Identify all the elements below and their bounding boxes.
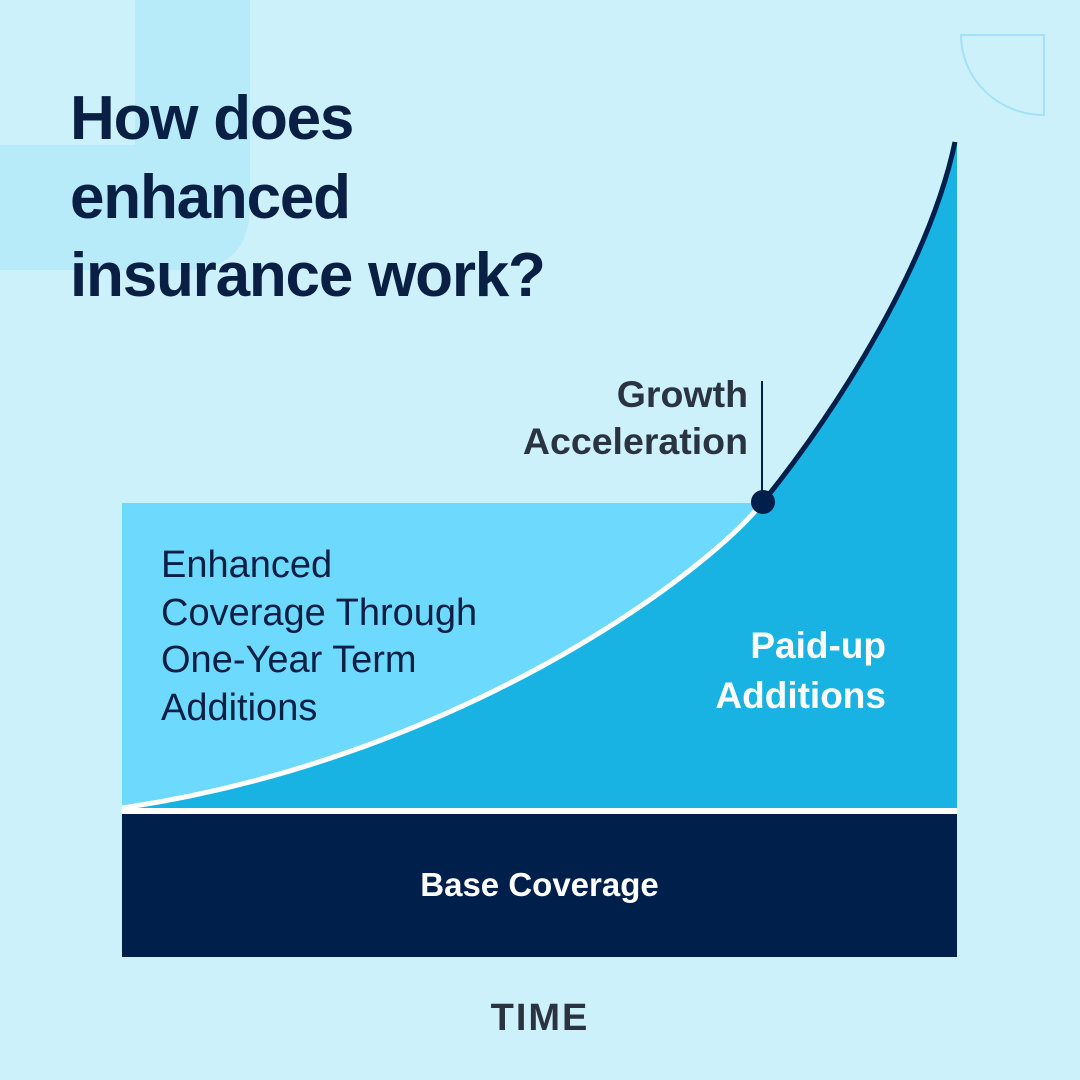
label: growth acceleration (523, 373, 748, 462)
label: term additions: Enhanced (161, 544, 332, 586)
title: insurance work? (70, 241, 545, 310)
label: paid-up additions: Additions (715, 675, 886, 716)
label: term additions: Additions (161, 686, 317, 728)
label: paid-up additions: Paid-up (750, 625, 886, 666)
label: base coverage: Base Coverage (420, 866, 659, 903)
title: How does (70, 84, 353, 153)
title: enhanced (70, 162, 350, 232)
label: growth acceleration: Growth (617, 373, 748, 415)
callout line (761, 381, 763, 502)
base coverage bar (122, 814, 957, 957)
label: term additions (161, 544, 477, 728)
label: paid-up additions (715, 625, 886, 716)
label: growth acceleration: Acceleration (523, 420, 748, 462)
label: term additions: Coverage Through (161, 592, 477, 634)
axis label: time: TIME (491, 997, 589, 1039)
area: term additions (122, 503, 957, 809)
area: paid-up additions (122, 142, 957, 809)
label: term additions: One-Year Term (161, 639, 417, 681)
curve white part (122, 502, 763, 808)
callout dot (751, 490, 775, 514)
title (70, 84, 545, 310)
curve navy part (763, 142, 955, 502)
